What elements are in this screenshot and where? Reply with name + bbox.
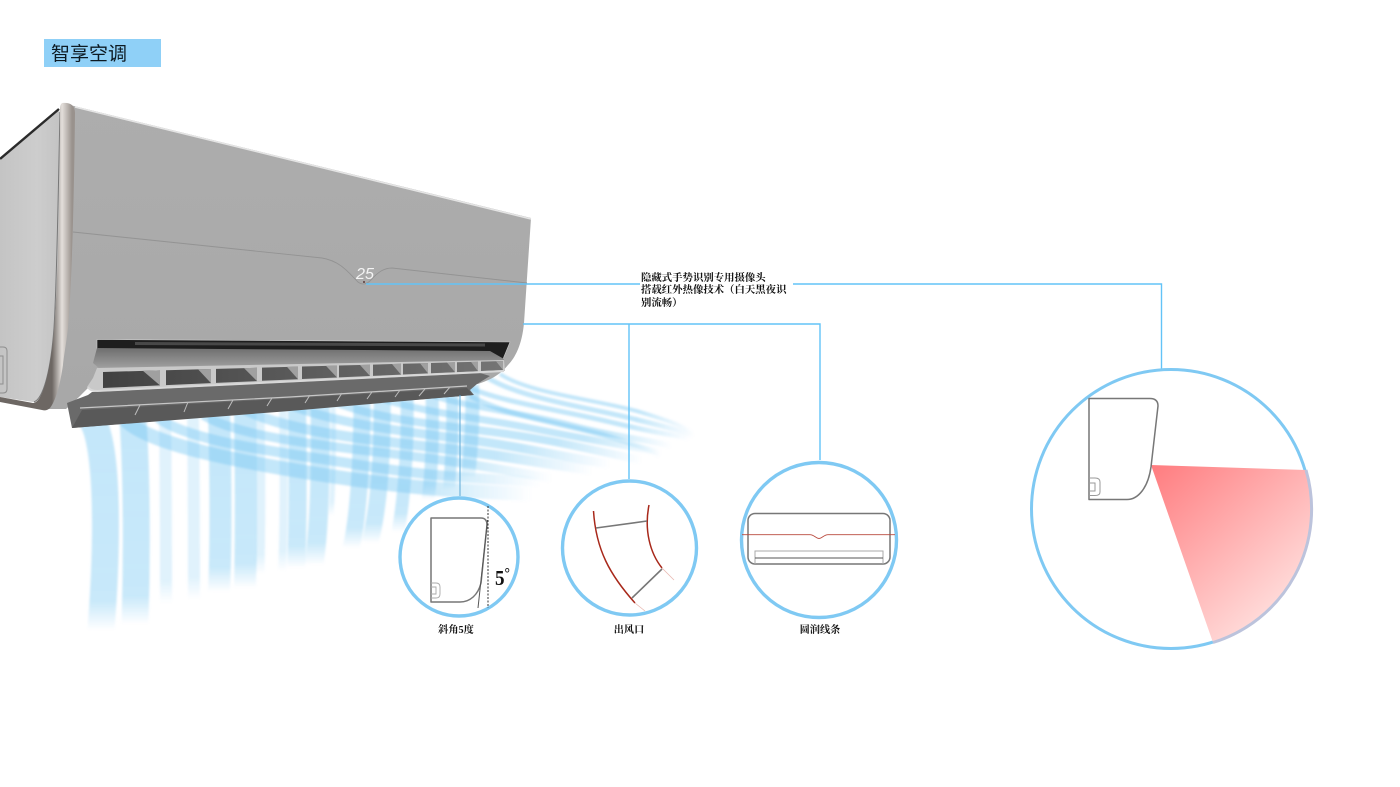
- lower blade: [67, 373, 490, 428]
- air outlet slot: [97, 340, 510, 361]
- red seam line: [742, 535, 895, 538]
- outlet right curve: [647, 505, 662, 568]
- airflow: [92, 374, 694, 630]
- callout: hidden camera description: 别流畅）: [641, 296, 683, 309]
- front casing: [48, 105, 531, 409]
- side panel button icon: [0, 347, 7, 393]
- caption: rounded lines: 圆润线条: [800, 623, 841, 636]
- front outline: [748, 514, 890, 564]
- infrared wedge: [1151, 465, 1312, 642]
- side panel inner dark edge: [34, 112, 60, 402]
- vent line: [755, 557, 883, 559]
- side panel: [0, 111, 62, 402]
- airflow: downward streams: [92, 385, 472, 630]
- caption: bevel: 斜角5度: [438, 623, 474, 636]
- lower slats: [72, 386, 473, 428]
- tilted line: [478, 520, 488, 608]
- louvre cell highlights: [143, 361, 503, 385]
- slot texture: [135, 344, 485, 345]
- detail circle: rounded lines: [742, 462, 896, 618]
- profile outline: [1089, 398, 1158, 500]
- detail circle: 5 degree tilt: [400, 498, 518, 616]
- detail circle: air outlet: [562, 481, 696, 615]
- title: [44, 39, 161, 67]
- side panel dark top edge: [0, 109, 59, 159]
- detail circle: infrared sensing: [1032, 370, 1312, 648]
- louvre cells: [103, 361, 503, 388]
- outlet grey lines: [596, 521, 662, 598]
- camera dot: [363, 281, 365, 283]
- vertical dotted line: [487, 506, 489, 608]
- title: 智享空调: [51, 43, 127, 65]
- louvre frame: [87, 360, 505, 392]
- airflow: pale downward streams: [165, 400, 333, 603]
- blade highlight: [88, 371, 504, 391]
- profile button: [1089, 478, 1100, 496]
- upper flap: [93, 348, 504, 369]
- vent outline: [755, 551, 883, 564]
- temperature display: 25: [355, 266, 374, 283]
- silver bezel: [0, 103, 75, 410]
- angle label: 5: [495, 566, 506, 590]
- leader lines: [366, 284, 1162, 496]
- air conditioner unit: [0, 103, 531, 428]
- callout: hidden camera description: 搭载红外热像技术（白天黑夜识: [641, 283, 788, 296]
- outlet faint tails: [635, 568, 674, 611]
- front casing top highlight: [75, 107, 531, 219]
- outlet left curve: [594, 511, 635, 603]
- callout: hidden camera description: 隐藏式手势识别专用摄像头: [641, 271, 767, 284]
- wedge ring overlap: [1213, 470, 1312, 642]
- angle label: °: [505, 566, 510, 582]
- profile button: [431, 583, 440, 598]
- callout: hidden camera description: [641, 271, 788, 309]
- airflow: sideways streams: [125, 374, 694, 494]
- caption: outlet: 出风口: [614, 623, 644, 636]
- panel seam line: [73, 232, 527, 284]
- profile outline: [431, 518, 487, 602]
